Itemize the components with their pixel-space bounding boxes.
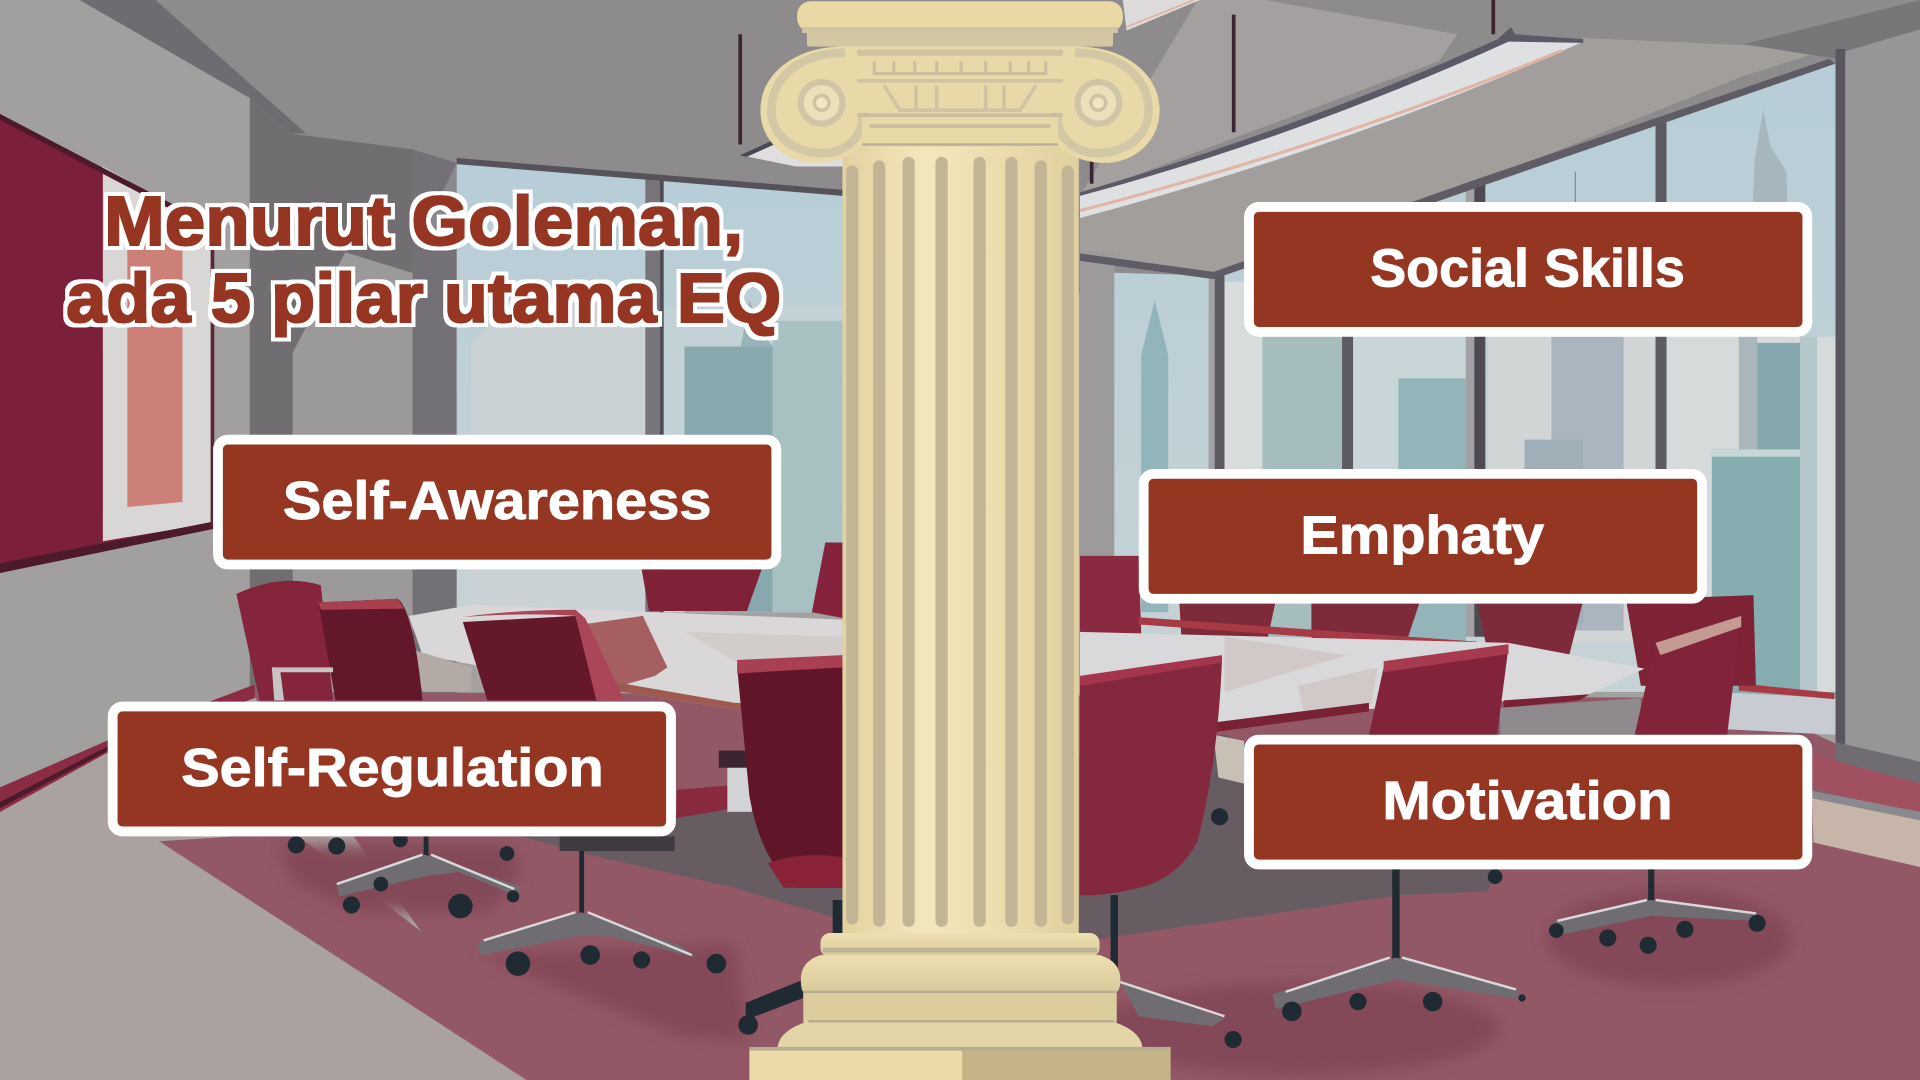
left windows — [457, 158, 842, 612]
title — [66, 182, 781, 337]
conference table — [409, 605, 1644, 784]
label: Emphaty — [1144, 474, 1702, 599]
title: ada 5 pilar utama EQ — [66, 259, 781, 337]
left chairs — [236, 581, 842, 888]
pillar base — [749, 933, 1171, 1080]
title: Menurut Goleman, — [104, 182, 743, 260]
back chairs — [642, 542, 1756, 686]
ceiling light strips — [738, 0, 1583, 218]
label: Motivation — [1249, 740, 1807, 864]
wall columns — [250, 98, 457, 735]
right chairs — [1080, 600, 1751, 895]
right wall — [1836, 29, 1920, 796]
label: Self-Awareness — [218, 440, 776, 564]
label: Social Skills — [1249, 207, 1807, 332]
left wall with red panel — [0, 0, 306, 857]
label: Self-Awareness: Self-Awareness — [283, 471, 711, 531]
label: Self-Regulation: Self-Regulation — [181, 738, 604, 798]
ceiling — [0, 0, 1920, 294]
label: Emphaty: Emphaty — [1300, 505, 1544, 565]
label: Motivation: Motivation — [1382, 771, 1673, 831]
pillar — [749, 1, 1171, 1080]
label: Social Skills: Social Skills — [1370, 239, 1685, 299]
chair bases — [288, 808, 1766, 1048]
right windows — [1080, 59, 1836, 694]
pillar shaft — [842, 116, 1079, 937]
pillar flutes — [852, 163, 1068, 921]
pillar capital — [760, 1, 1160, 163]
floor — [0, 683, 1920, 1080]
label: Self-Regulation — [113, 707, 671, 831]
